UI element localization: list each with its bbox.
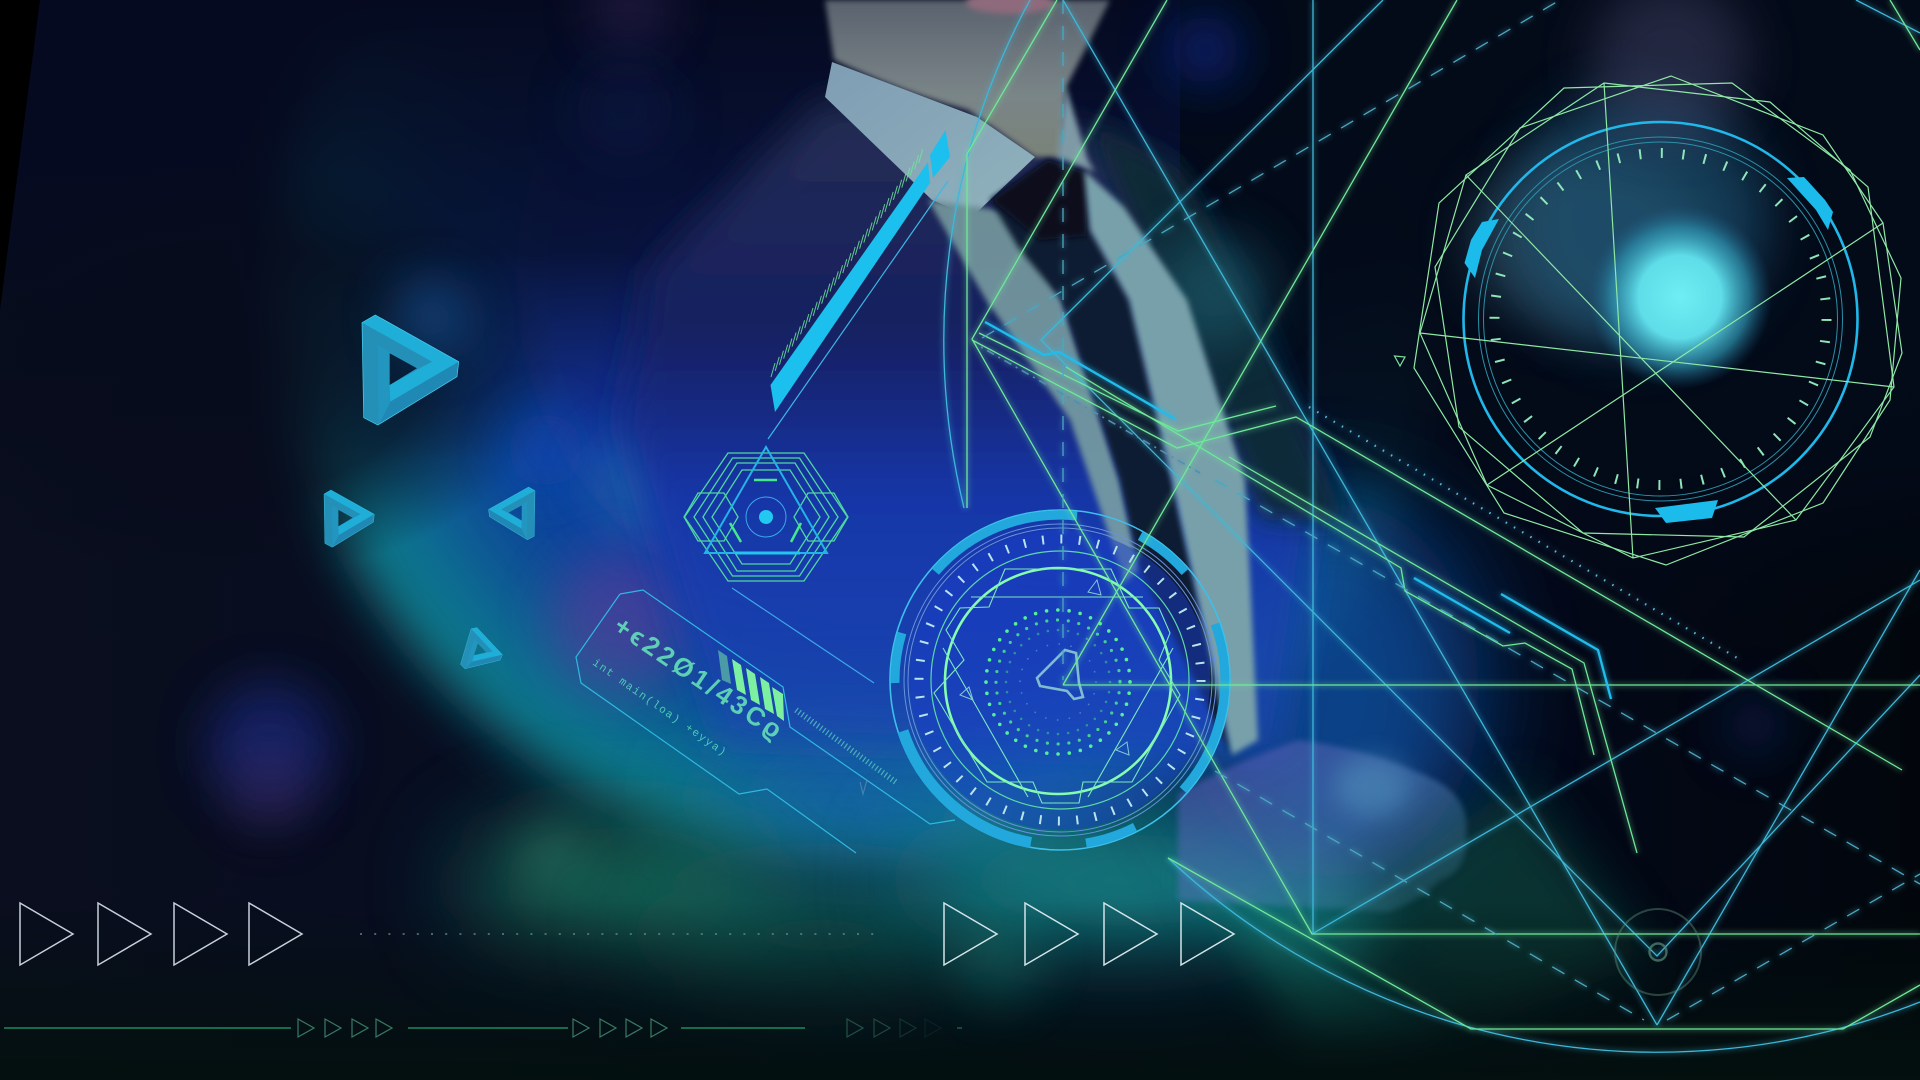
thick cyan circuit traces xyxy=(985,322,1611,699)
inner rings xyxy=(1478,137,1842,501)
tick strip xyxy=(796,710,897,783)
tie xyxy=(990,160,1232,755)
connector line xyxy=(732,588,874,683)
faded target circle xyxy=(1615,909,1701,995)
hand xyxy=(1178,740,1466,912)
base bar xyxy=(735,552,800,554)
dotted lines xyxy=(1309,407,1739,659)
tie knot xyxy=(992,160,1086,240)
wire polygons xyxy=(1414,76,1902,565)
green status bars xyxy=(718,650,784,721)
icon: lower triangle xyxy=(459,626,508,678)
shirt collar right xyxy=(1057,87,1095,172)
neck xyxy=(825,0,1110,157)
tick ring xyxy=(1494,153,1826,485)
arrow row: centre xyxy=(944,903,1234,965)
lips xyxy=(966,0,1054,14)
polygon frame xyxy=(934,569,1180,803)
triangle xyxy=(705,447,827,553)
cyan lines xyxy=(944,0,1920,1052)
triangle lines xyxy=(943,597,1173,797)
small triangle xyxy=(1394,356,1405,366)
green marks xyxy=(730,480,801,542)
dotted divider xyxy=(360,933,874,935)
centre ring xyxy=(746,497,786,537)
small triangle markers xyxy=(960,580,1129,755)
dashed lines xyxy=(982,0,1920,1020)
icon: large triangle xyxy=(362,315,459,425)
green lines xyxy=(967,0,1920,1029)
thin rings xyxy=(904,524,1216,836)
bar tip xyxy=(930,130,950,178)
tick ring xyxy=(919,539,1201,821)
small mark xyxy=(860,780,867,794)
lens glow xyxy=(1470,0,1772,389)
star lines xyxy=(1420,83,1894,558)
geometric line network xyxy=(944,0,1920,1052)
right lapel shadow xyxy=(1090,120,1345,520)
teal haze xyxy=(1160,235,1270,345)
hexagon target widget xyxy=(684,447,848,581)
icon: left triangle xyxy=(324,490,374,547)
icon: right triangle xyxy=(489,487,535,540)
small code text: int main(loa) +eyya) xyxy=(590,657,728,759)
jacket xyxy=(620,100,1320,760)
dot rings xyxy=(986,610,1130,754)
shirt front left xyxy=(928,200,1140,582)
code panel xyxy=(576,588,955,853)
outer ring xyxy=(890,510,1230,850)
thick segments xyxy=(1787,177,1833,230)
dial: blue clock xyxy=(890,510,1230,850)
bokeh lights xyxy=(208,0,1782,1005)
bottom line with small arrows xyxy=(4,1019,962,1037)
shirt collar left xyxy=(825,62,1035,217)
panel outline xyxy=(620,590,955,824)
long diagonal cyan bar xyxy=(768,130,950,439)
bright green ring xyxy=(945,568,1171,794)
centre dot xyxy=(759,510,773,524)
bar xyxy=(770,162,930,412)
impossible triangle icons xyxy=(324,315,535,678)
arrow row: left xyxy=(20,903,302,965)
outer thick arcs xyxy=(895,515,1225,843)
glyph code text: +ϵ22Ø1/43Cϱ xyxy=(609,610,788,745)
main ring xyxy=(1464,122,1858,516)
hatch marks xyxy=(771,149,923,377)
person in suit xyxy=(620,0,1466,912)
shirt front right xyxy=(1084,170,1258,755)
dial: upper right lens xyxy=(1394,0,1902,565)
clock hands xyxy=(1037,650,1083,699)
thin line xyxy=(768,181,948,439)
